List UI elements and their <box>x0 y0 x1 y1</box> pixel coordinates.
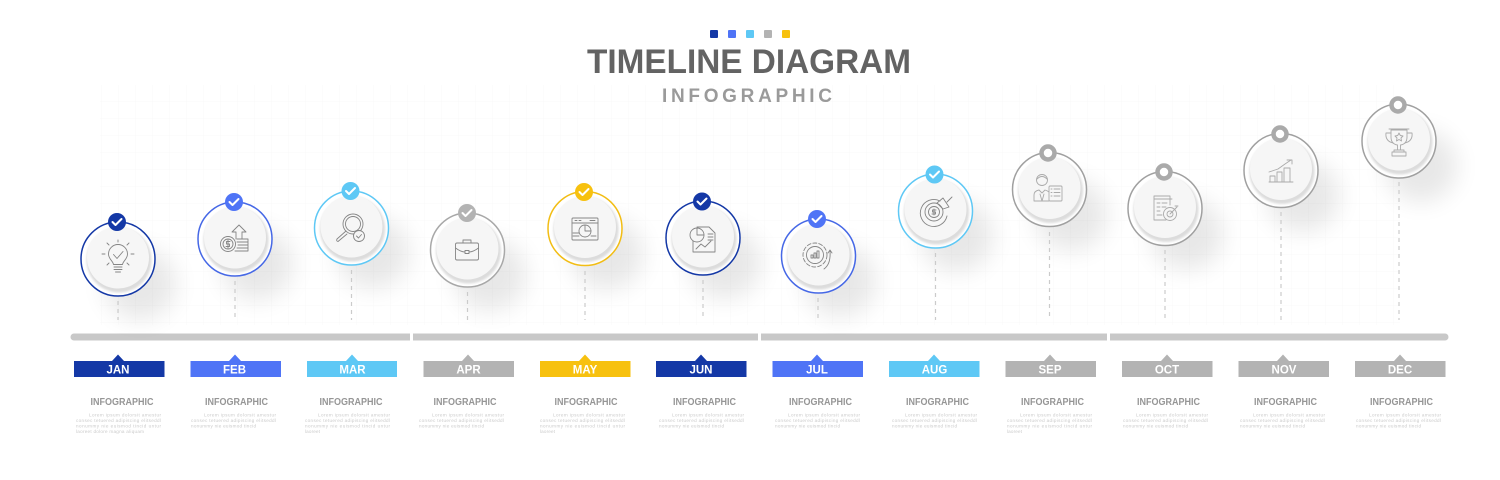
icon: gear with bars <box>803 243 832 269</box>
title: TIMELINE DIAGRAM <box>587 43 911 81</box>
month label: MAY <box>540 354 630 377</box>
text block: APR: Lorem ipsum dolorsit amestur <box>432 412 504 418</box>
icon: document with target <box>1154 196 1178 220</box>
text block: MAY: INFOGRAPHIC <box>554 397 618 408</box>
text block: MAY <box>540 397 625 434</box>
text block: MAR <box>305 397 390 434</box>
text block: SEP: INFOGRAPHIC <box>1021 397 1084 408</box>
text block: NOV: consec tetuered adipiscing elitseddl <box>1240 418 1325 423</box>
text block: JUN <box>659 397 744 428</box>
month label: JUN <box>656 354 746 377</box>
text block: JAN: INFOGRAPHIC <box>90 397 154 408</box>
month label: APR: APR <box>456 364 481 376</box>
icon: report with pie chart <box>690 227 715 252</box>
node: JUL <box>782 210 876 320</box>
text block: JUN: consec tetuered adipiscing elitseddl <box>659 418 744 423</box>
node: JUN <box>666 192 761 320</box>
timeline bar <box>71 334 1449 341</box>
node: APR <box>430 204 526 320</box>
text block: JAN: laoreet dolore magna aliquam <box>76 429 144 434</box>
text block: APR <box>419 397 504 428</box>
month label: SEP: SEP <box>1038 364 1062 376</box>
text block: NOV <box>1240 397 1325 428</box>
ring badge <box>1158 166 1170 178</box>
month label: OCT <box>1122 354 1212 377</box>
month label: FEB: FEB <box>223 364 246 376</box>
month label: MAR: MAR <box>339 364 366 376</box>
text block: JAN: consec tetuered adipiscing elitseddl <box>76 418 161 423</box>
icon: person with checklist <box>1034 174 1062 201</box>
text block: AUG: nonummy nie euismod tincid <box>892 424 957 428</box>
badge <box>693 192 711 210</box>
month label: AUG <box>889 354 980 377</box>
text block: SEP <box>1007 397 1092 434</box>
text block: MAY: consec tetuered adipiscing elitseddl <box>540 418 625 423</box>
month label: DEC <box>1355 354 1446 377</box>
text block: MAR: consec tetuered adipiscing elitseddl <box>305 418 390 423</box>
badge <box>108 213 126 231</box>
text block: SEP: nonummy nie euismod tincid untur <box>1007 424 1092 428</box>
badge <box>808 210 826 228</box>
month label: MAY: MAY <box>573 364 598 376</box>
node: MAR <box>314 182 409 320</box>
month label: AUG: AUG <box>922 364 947 376</box>
month label: NOV: NOV <box>1272 364 1297 376</box>
node: AUG <box>898 166 993 320</box>
text block: FEB: INFOGRAPHIC <box>205 397 268 408</box>
text block: OCT: INFOGRAPHIC <box>1137 397 1200 408</box>
text block: MAR: nonummy nie euismod tincid untur <box>305 424 390 428</box>
colour squares <box>710 30 790 38</box>
node: DEC <box>1362 98 1457 320</box>
text block: AUG: Lorem ipsum dolorsit amestur <box>905 412 977 418</box>
node: FEB <box>198 193 293 320</box>
node: MAY <box>548 183 643 320</box>
text block: APR: consec tetuered adipiscing elitseddl <box>419 418 504 423</box>
text block: SEP: laoreet <box>1007 429 1023 434</box>
month label: SEP <box>1006 354 1096 377</box>
text block: MAY: laoreet <box>540 429 556 434</box>
month label: JAN: JAN <box>106 364 130 376</box>
text block: JUL <box>775 397 860 428</box>
text block: OCT: consec tetuered adipiscing elitseddl <box>1123 418 1208 423</box>
text block: AUG <box>892 397 977 428</box>
text block: JUN: INFOGRAPHIC <box>673 397 736 408</box>
icon: light bulb <box>102 240 134 272</box>
month label: NOV <box>1238 354 1329 377</box>
text block: FEB <box>191 397 276 428</box>
text block: FEB: nonummy nie euismod tincid <box>191 424 256 428</box>
text block: JAN: nonummy nie euismod tincid untur <box>76 424 161 428</box>
ring badge <box>1392 98 1404 112</box>
node: OCT <box>1128 166 1223 320</box>
text block: JUL: INFOGRAPHIC <box>789 397 852 408</box>
badge <box>225 193 243 211</box>
month label: JUN: JUN <box>689 364 713 376</box>
text block: JAN <box>76 397 161 434</box>
text block: OCT: nonummy nie euismod tincid <box>1123 424 1188 428</box>
text block: OCT: Lorem ipsum dolorsit amestur <box>1136 412 1208 418</box>
text block: JUN: nonummy nie euismod tincid <box>659 424 724 428</box>
month label: JUL <box>772 354 863 377</box>
month label: APR <box>424 354 514 377</box>
text block: FEB: Lorem ipsum dolorsit amestur <box>204 412 276 418</box>
node: JAN <box>81 213 176 320</box>
icon: briefcase <box>456 240 478 260</box>
text block: DEC <box>1356 397 1441 428</box>
icon: dollar target <box>920 197 952 227</box>
text block: FEB: consec tetuered adipiscing elitseddl <box>191 418 276 423</box>
month label: JUL: JUL <box>806 364 828 376</box>
text block: MAY: nonummy nie euismod tincid untur <box>540 424 625 428</box>
month label: DEC: DEC <box>1388 364 1412 376</box>
month label: JAN <box>74 354 164 377</box>
text block: AUG: consec tetuered adipiscing elitseddl <box>892 418 977 423</box>
month label: OCT: OCT <box>1155 364 1179 376</box>
text block: DEC: INFOGRAPHIC <box>1370 397 1433 408</box>
month label: MAR <box>307 354 397 377</box>
icon: browser window with chart <box>572 218 598 240</box>
node: SEP <box>1012 146 1107 320</box>
text block: JUL: consec tetuered adipiscing elitseddl <box>775 418 860 423</box>
text block: DEC: consec tetuered adipiscing elitseddl <box>1356 418 1441 423</box>
subtitle: INFOGRAPHIC <box>662 86 832 107</box>
text block: NOV: Lorem ipsum dolorsit amestur <box>1253 412 1325 418</box>
icon: growth bar chart <box>1269 160 1293 182</box>
text block: JUL: nonummy nie euismod tincid <box>775 424 840 428</box>
text block: APR: INFOGRAPHIC <box>434 397 496 408</box>
text block: JUN: Lorem ipsum dolorsit amestur <box>672 412 744 418</box>
ring badge <box>1274 128 1286 140</box>
badge <box>342 182 360 200</box>
badge <box>575 183 593 201</box>
text block: SEP: consec tetuered adipiscing elitseddl <box>1007 418 1092 423</box>
text block: MAR: Lorem ipsum dolorsit amestur <box>318 412 390 418</box>
month label: FEB <box>190 354 281 377</box>
icon: coins and up arrow <box>220 225 248 252</box>
text block: NOV: nonummy nie euismod tincid <box>1240 424 1305 428</box>
badge <box>926 166 944 184</box>
text block: DEC: Lorem ipsum dolorsit amestur <box>1369 412 1441 418</box>
text block: MAR: laoreet <box>305 429 321 434</box>
text block: MAY: Lorem ipsum dolorsit amestur <box>553 412 625 418</box>
ring badge <box>1042 146 1054 160</box>
badge <box>458 204 476 222</box>
text block: SEP: Lorem ipsum dolorsit amestur <box>1020 412 1092 418</box>
text block: MAR: INFOGRAPHIC <box>320 397 382 408</box>
text block: APR: nonummy nie euismod tincid <box>419 424 484 428</box>
text block: JUL: Lorem ipsum dolorsit amestur <box>788 412 860 418</box>
text block: NOV: INFOGRAPHIC <box>1254 397 1317 408</box>
text block: OCT <box>1123 397 1208 428</box>
text block: DEC: nonummy nie euismod tincid <box>1356 424 1421 428</box>
node: NOV <box>1244 128 1339 320</box>
text block: JAN: Lorem ipsum dolorsit amestur <box>89 412 161 418</box>
text block: AUG: INFOGRAPHIC <box>906 397 969 408</box>
icon: trophy <box>1386 129 1412 156</box>
icon: magnifier with check <box>337 214 364 242</box>
